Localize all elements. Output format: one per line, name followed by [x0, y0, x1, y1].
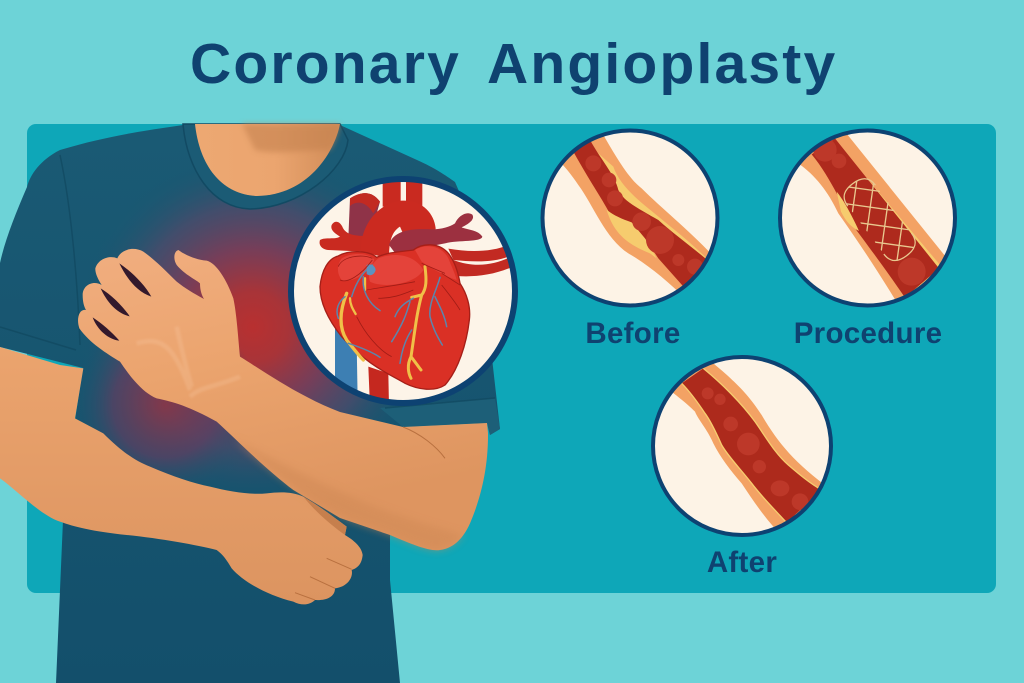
t-shirt — [0, 125, 500, 683]
blood cells — [702, 387, 808, 510]
superior vena cava — [348, 193, 380, 236]
heart body — [320, 245, 470, 389]
plaque — [598, 152, 706, 258]
blood cells — [813, 138, 926, 286]
left side branches — [320, 222, 365, 252]
heart highlights — [338, 246, 457, 285]
neck shadow — [242, 124, 340, 152]
circle border — [291, 179, 515, 403]
narrowed lumen — [573, 140, 713, 288]
vessel wall — [563, 136, 709, 290]
dark vein lines — [338, 256, 460, 357]
upper arm and hand on chest — [78, 249, 488, 550]
stent — [844, 178, 916, 262]
before vessel circle — [542, 130, 722, 306]
red artery below heart — [368, 366, 389, 399]
panel: teal background — [27, 124, 996, 593]
aortic arch — [361, 201, 436, 258]
pulmonary artery — [389, 213, 482, 252]
circle background — [291, 179, 515, 403]
after vessel circle — [653, 357, 832, 537]
label: Procedure: Procedure — [794, 317, 942, 350]
collar — [183, 124, 348, 209]
plaque — [837, 192, 859, 231]
chest pain glow — [88, 185, 383, 480]
person with chest pain — [0, 124, 500, 683]
right side vessels — [448, 247, 510, 276]
sleeve seam and hem — [0, 155, 495, 408]
top branches — [383, 182, 422, 207]
yellow coronary arteries — [408, 267, 426, 378]
blood cells — [585, 155, 703, 275]
heart circle — [291, 179, 515, 407]
blue coronary veins — [337, 265, 447, 363]
label: Before: Before — [585, 317, 681, 350]
lower arm and fist — [0, 347, 363, 604]
blue vein below heart — [335, 328, 358, 390]
yellow lining — [682, 368, 822, 523]
procedure vessel circle — [780, 130, 955, 306]
lumen — [812, 138, 939, 298]
vessel wall — [798, 132, 948, 305]
neck — [195, 124, 340, 196]
thin yellow lining — [855, 181, 940, 290]
vessel wall — [673, 364, 821, 527]
title: Coronary — [190, 32, 461, 96]
lumen — [682, 368, 822, 523]
sleeve cuff — [380, 398, 500, 435]
label: After: After — [707, 546, 777, 579]
title: Angioplasty — [487, 32, 837, 96]
